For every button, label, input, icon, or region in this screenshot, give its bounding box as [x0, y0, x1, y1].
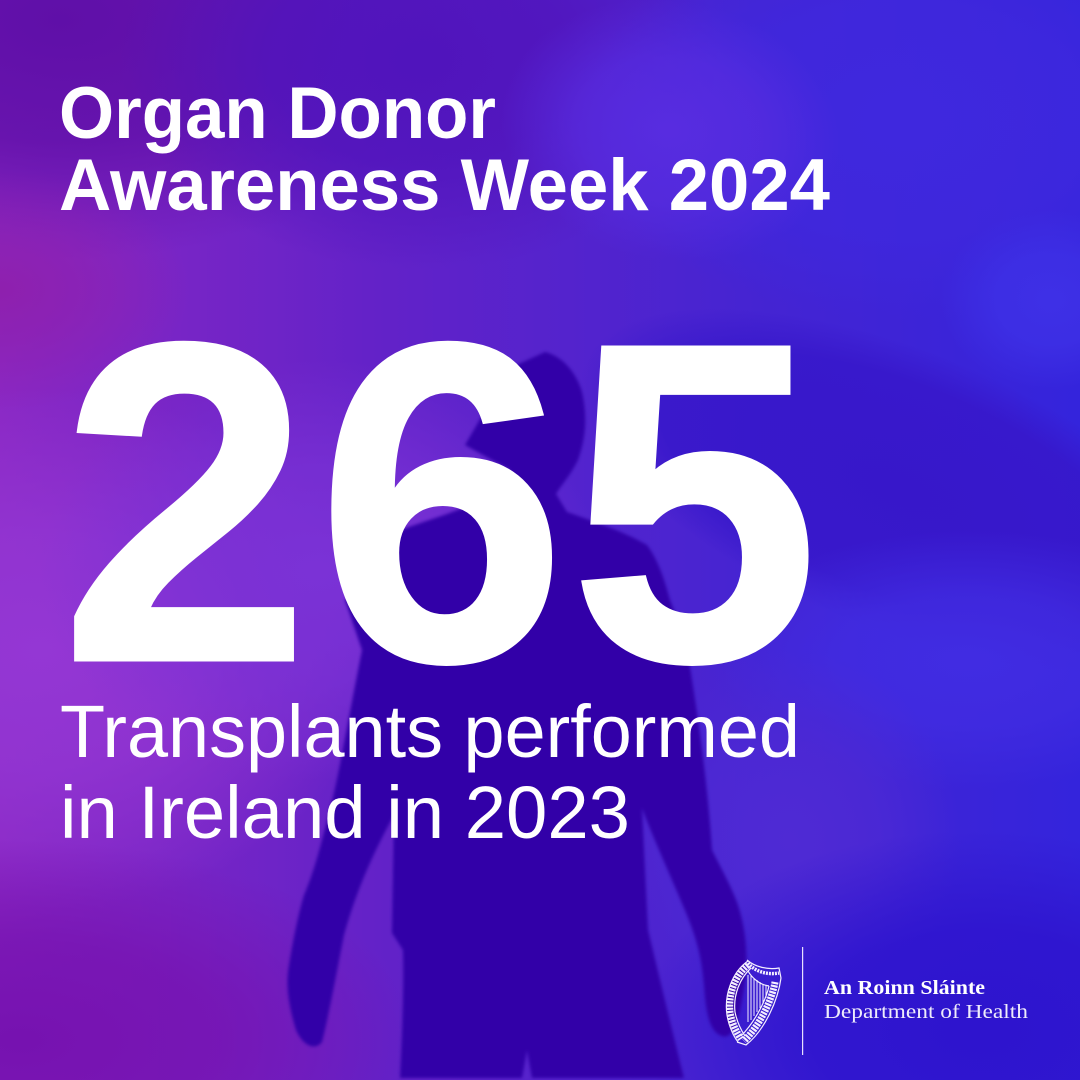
subtitle: in Ireland in 2023 [60, 771, 630, 854]
big number: 265: 265 [60, 248, 820, 756]
subtitle [60, 690, 800, 854]
icon: Irish harp [726, 960, 781, 1045]
logo text: Department of Health [824, 1001, 1028, 1023]
logo text: An Roinn Sláinte [824, 978, 985, 999]
logo text [824, 978, 1028, 1023]
logo: Department of Health [726, 947, 1028, 1055]
silhouette of a standing person [287, 352, 746, 1078]
title [59, 73, 830, 226]
divider line [802, 947, 803, 1055]
title: Organ Donor [59, 73, 496, 154]
title: Awareness Week 2024 [59, 145, 830, 226]
subtitle: Transplants performed [60, 690, 800, 773]
